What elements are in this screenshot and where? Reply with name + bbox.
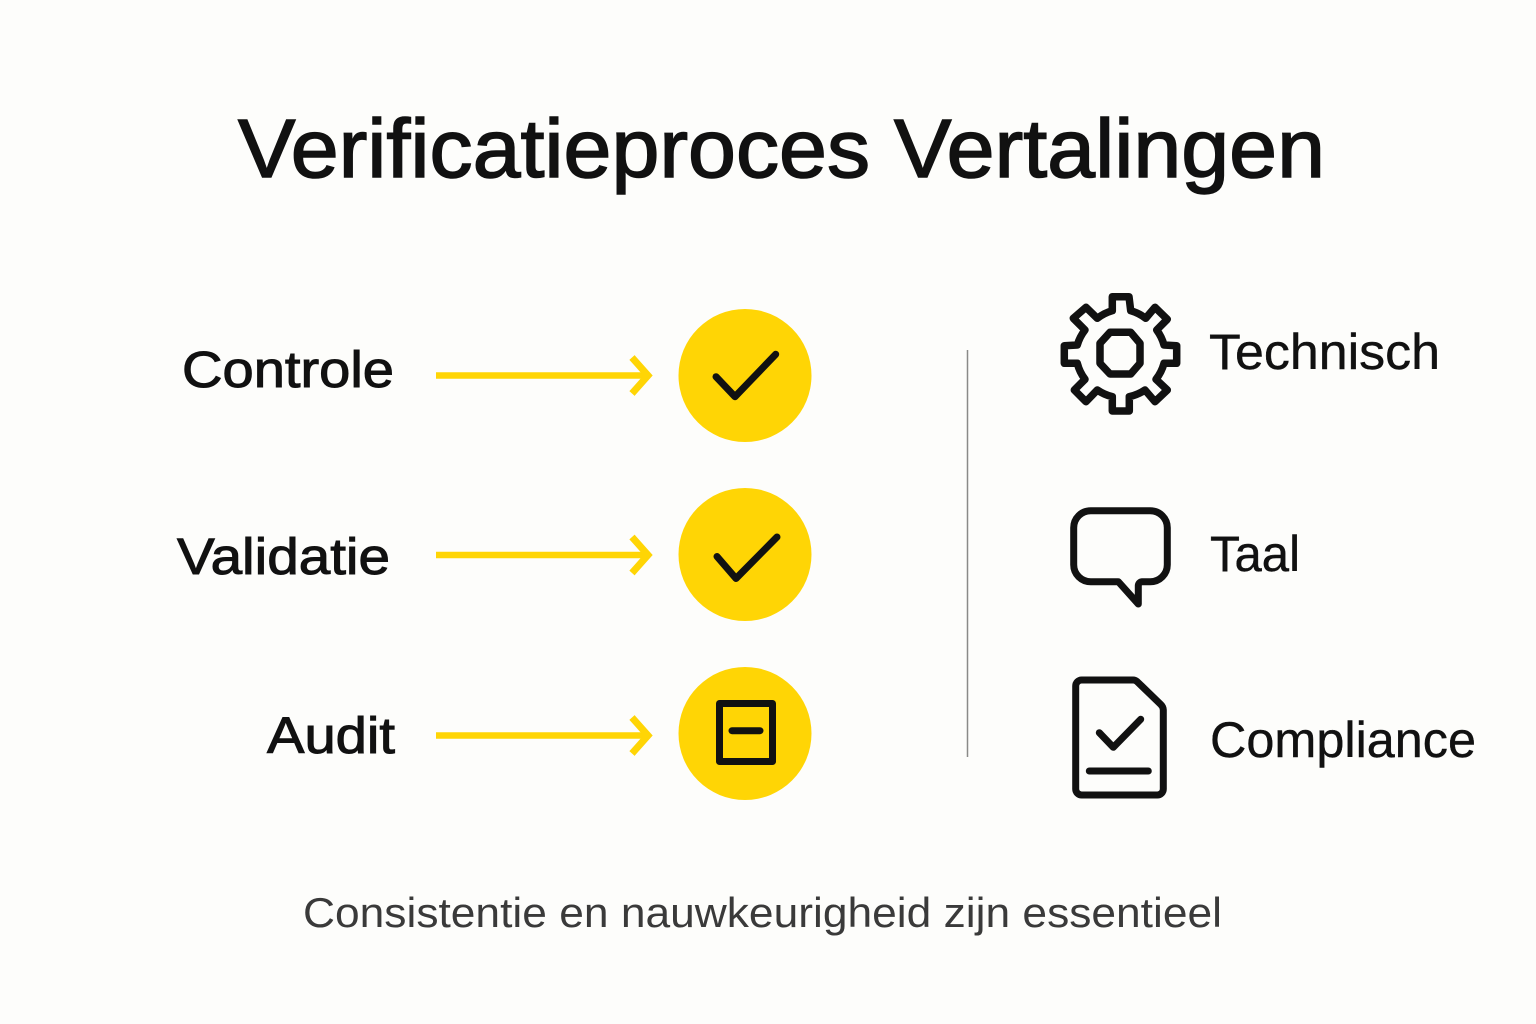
icon: checked document xyxy=(1076,680,1163,795)
label: Compliance: Compliance xyxy=(1210,712,1476,768)
step: Audit xyxy=(267,667,812,800)
arrow: Audit xyxy=(436,718,648,754)
category: Taal xyxy=(1074,511,1300,604)
arrow: Controle xyxy=(436,358,648,394)
label: Audit: Audit xyxy=(267,707,395,764)
icon: check badge xyxy=(678,488,812,621)
step: Controle xyxy=(182,309,812,442)
icon: document minus badge xyxy=(678,667,812,800)
footer caption: Consistentie en nauwkeurigheid zijn essentieel xyxy=(303,889,1222,936)
icon: gear xyxy=(1064,297,1177,411)
panel: process steps xyxy=(177,309,812,800)
panel: verification categories xyxy=(1064,297,1476,795)
title: Verificatieproces Vertalingen xyxy=(238,102,1325,195)
category: Technisch xyxy=(1064,297,1440,411)
arrow: Validatie xyxy=(436,537,648,573)
icon: speech bubble xyxy=(1074,511,1167,604)
label: Controle: Controle xyxy=(182,341,394,398)
label: Technisch: Technisch xyxy=(1209,324,1440,380)
category: Compliance xyxy=(1076,680,1476,795)
icon: check badge xyxy=(678,309,812,442)
step: Validatie xyxy=(177,488,812,621)
label: Validatie: Validatie xyxy=(177,528,390,585)
label: Taal: Taal xyxy=(1210,526,1300,582)
